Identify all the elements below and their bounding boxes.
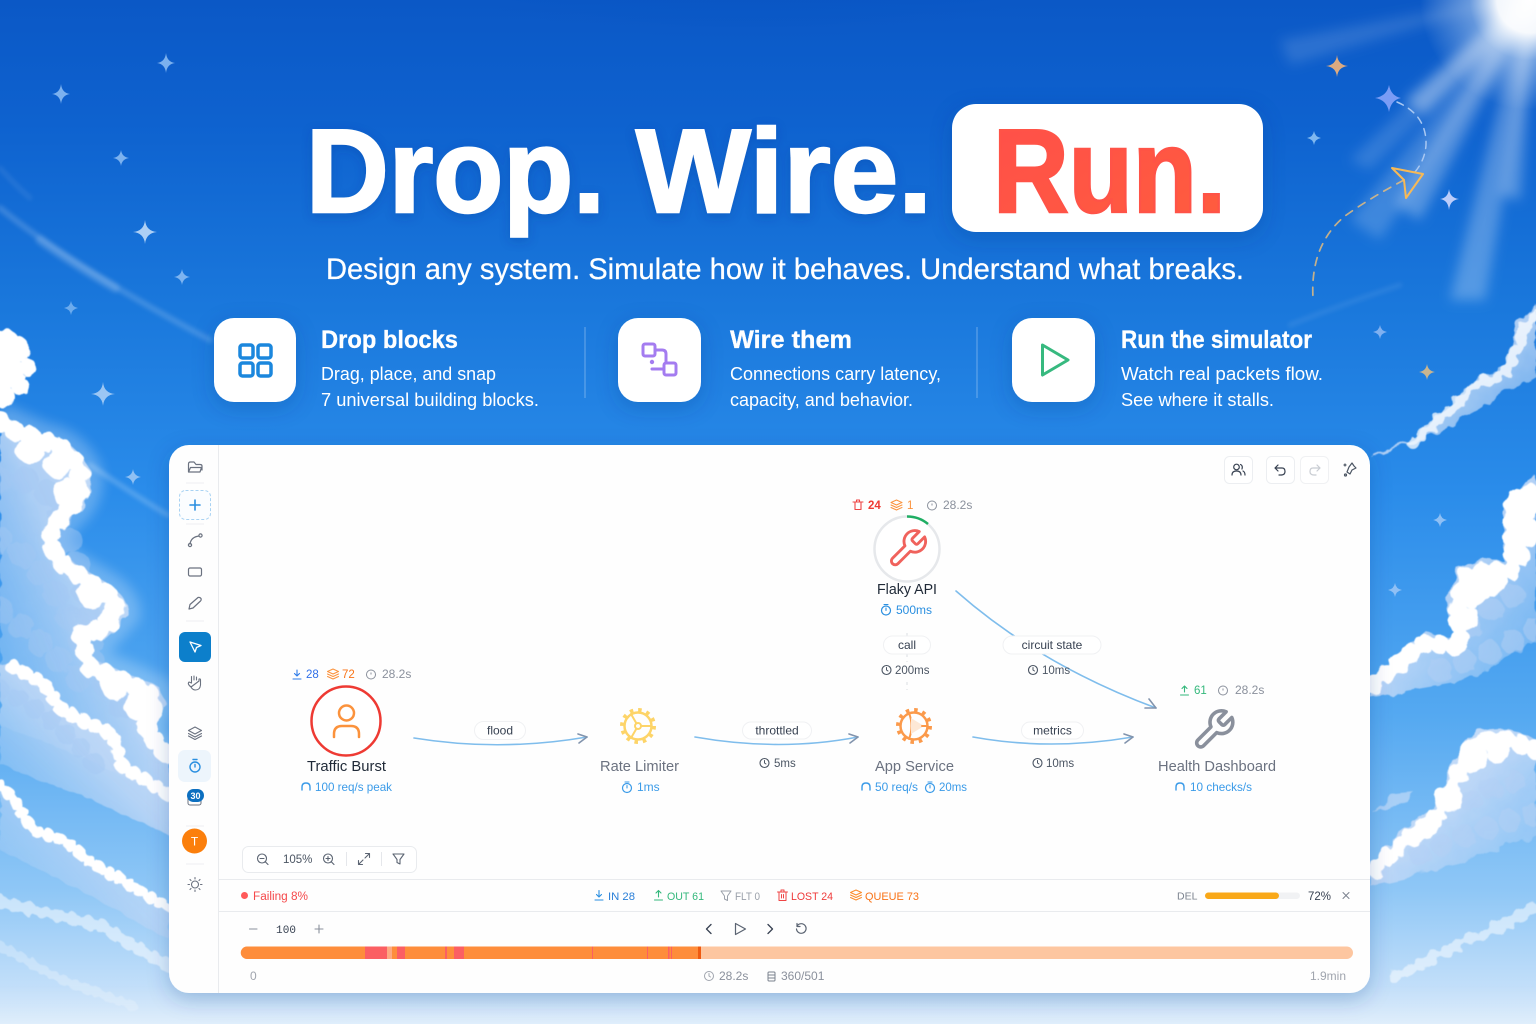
feature: run the simulator: Watch real packets flow. — [1121, 363, 1323, 384]
failing status: Failing 8% — [253, 891, 308, 903]
edge: throttled — [695, 722, 858, 770]
metrics: 72 — [342, 669, 355, 681]
feature: drop blocks — [214, 318, 539, 410]
title — [306, 104, 1263, 238]
badge: 30: 30 — [190, 791, 201, 801]
feature: run the simulator: See where it stalls. — [1121, 389, 1274, 410]
metrics: 61 — [1194, 685, 1207, 697]
metrics: 24 — [868, 500, 881, 512]
paper plane with dashed flight path — [1313, 102, 1426, 298]
icon: hand — [188, 676, 200, 690]
node: app service: 50 req/s — [875, 780, 918, 794]
node: traffic burst: 100 req/s peak — [315, 780, 393, 794]
avatar — [182, 828, 207, 854]
button: add — [180, 490, 210, 520]
edge: throttled: 5ms — [774, 758, 796, 770]
title: Wire. — [636, 105, 932, 238]
node: flaky api — [853, 498, 972, 617]
timeline labels: 28.2s — [719, 969, 748, 983]
feature: drop blocks: 7 universal building blocks. — [321, 389, 539, 410]
playback controls: 100 — [276, 925, 296, 937]
top right actions — [1224, 456, 1356, 484]
edge: circuit state — [956, 591, 1156, 708]
button: users — [1224, 456, 1252, 484]
node: flaky api: 500ms — [896, 603, 932, 617]
sparkles — [52, 53, 1459, 597]
feature: run the simulator: Run the simulator — [1121, 326, 1312, 354]
cirrus wisps — [0, 168, 1400, 515]
icon: grid blocks — [214, 318, 296, 402]
icon: pencil — [189, 597, 201, 609]
metrics: 28 — [306, 669, 319, 681]
clouds left — [0, 328, 170, 1006]
stat: filtered: FLT 0 — [735, 891, 760, 903]
button: undo — [1266, 456, 1294, 484]
icon: grey wrench — [1197, 711, 1233, 747]
node: rate limiter — [600, 710, 679, 794]
timeline labels — [250, 969, 1346, 983]
node: health dashboard: Health Dashboard — [1158, 759, 1276, 775]
timeline labels: 0 — [250, 969, 257, 983]
stat: in — [595, 890, 635, 903]
sun rays top right — [1280, 0, 1536, 300]
zoom toolbar — [242, 846, 416, 872]
edge: circuit state: 10ms — [1042, 665, 1070, 677]
bottom haze — [0, 985, 1536, 1024]
icon: magic — [1344, 463, 1356, 476]
button: redo — [1300, 456, 1328, 484]
feature: wire them: capacity, and behavior. — [730, 389, 913, 410]
metrics: 28.2s — [943, 498, 972, 512]
clouds right — [1370, 304, 1536, 977]
edge: circuit state: circuit state — [1022, 638, 1083, 652]
metrics: 28.2s — [382, 667, 411, 681]
stat: filtered — [721, 891, 760, 903]
timeline bar — [241, 946, 1353, 959]
avatar: T — [191, 834, 199, 848]
panel: left toolbar — [178, 462, 211, 892]
edge: throttled: throttled — [755, 724, 799, 738]
edge: metrics: metrics — [1033, 724, 1072, 738]
stat: queue: QUEUE 73 — [865, 891, 919, 903]
icon: gear yellow — [622, 710, 654, 742]
metrics — [1180, 683, 1264, 697]
delivery progress: 72% — [1308, 891, 1331, 903]
status bar — [241, 890, 1349, 903]
stat: in: IN 28 — [608, 891, 635, 903]
stat: out — [654, 890, 704, 903]
node: health dashboard — [1158, 683, 1276, 794]
edge: flood: flood — [487, 724, 513, 738]
timeline labels: 1.9min — [1310, 969, 1346, 983]
stat: out: OUT 61 — [667, 891, 704, 903]
timeline labels: 360/501 — [781, 969, 825, 983]
zoom toolbar: 105% — [283, 854, 312, 866]
panel: simulator app window — [169, 445, 1370, 993]
metrics: 28.2s — [1235, 683, 1264, 697]
icon: red wrench — [891, 531, 926, 565]
metrics — [853, 498, 972, 512]
playback controls — [250, 924, 806, 937]
feature: run the simulator — [1012, 318, 1323, 410]
node: rate limiter: Rate Limiter — [600, 759, 679, 775]
icon: wired nodes — [618, 318, 701, 402]
feature: drop blocks: Drop blocks — [321, 326, 458, 354]
run highlight: Run. — [993, 105, 1226, 238]
button: timer — [178, 750, 211, 782]
edge: metrics: 10ms — [1046, 758, 1074, 770]
edge: metrics — [973, 722, 1133, 770]
feature: wire them: Connections carry latency, — [730, 363, 941, 384]
icon: sun — [188, 878, 202, 892]
icon: gear orange — [898, 710, 930, 742]
feature: drop blocks: Drag, place, and snap — [321, 363, 496, 384]
stat: lost — [778, 890, 833, 903]
icon: layers — [188, 727, 202, 740]
title: Drop. — [306, 105, 605, 238]
node: app service: App Service — [875, 759, 954, 775]
icon: play — [1012, 318, 1095, 402]
edge: call: 200ms — [895, 665, 930, 677]
node: app service — [862, 710, 967, 794]
node: traffic burst — [293, 667, 411, 794]
icon: curve — [188, 534, 202, 547]
icon: rectangle — [188, 568, 202, 576]
subtitle: Design any system. Simulate how it behaves. Understand what breaks. — [326, 253, 1244, 286]
edge: call: call — [898, 638, 916, 652]
node: flaky api: Flaky API — [877, 582, 937, 598]
delivery progress — [1177, 890, 1349, 903]
node: app service: 20ms — [939, 780, 967, 794]
node: rate limiter: 1ms — [637, 780, 660, 794]
feature: wire them — [618, 318, 941, 410]
button: select cursor — [179, 632, 211, 662]
metrics: 1 — [907, 500, 913, 512]
node: health dashboard: 10 checks/s — [1190, 780, 1252, 794]
metrics — [293, 667, 411, 681]
icon: folder — [188, 462, 202, 472]
badge: 30 — [187, 789, 204, 805]
edge: call — [878, 633, 934, 690]
node: traffic burst: Traffic Burst — [307, 759, 386, 775]
upper puff — [0, 328, 35, 408]
delivery progress: DEL — [1177, 890, 1198, 902]
feature: wire them: Wire them — [730, 326, 852, 354]
stat: lost: LOST 24 — [791, 891, 833, 903]
edge: flood — [414, 722, 587, 745]
